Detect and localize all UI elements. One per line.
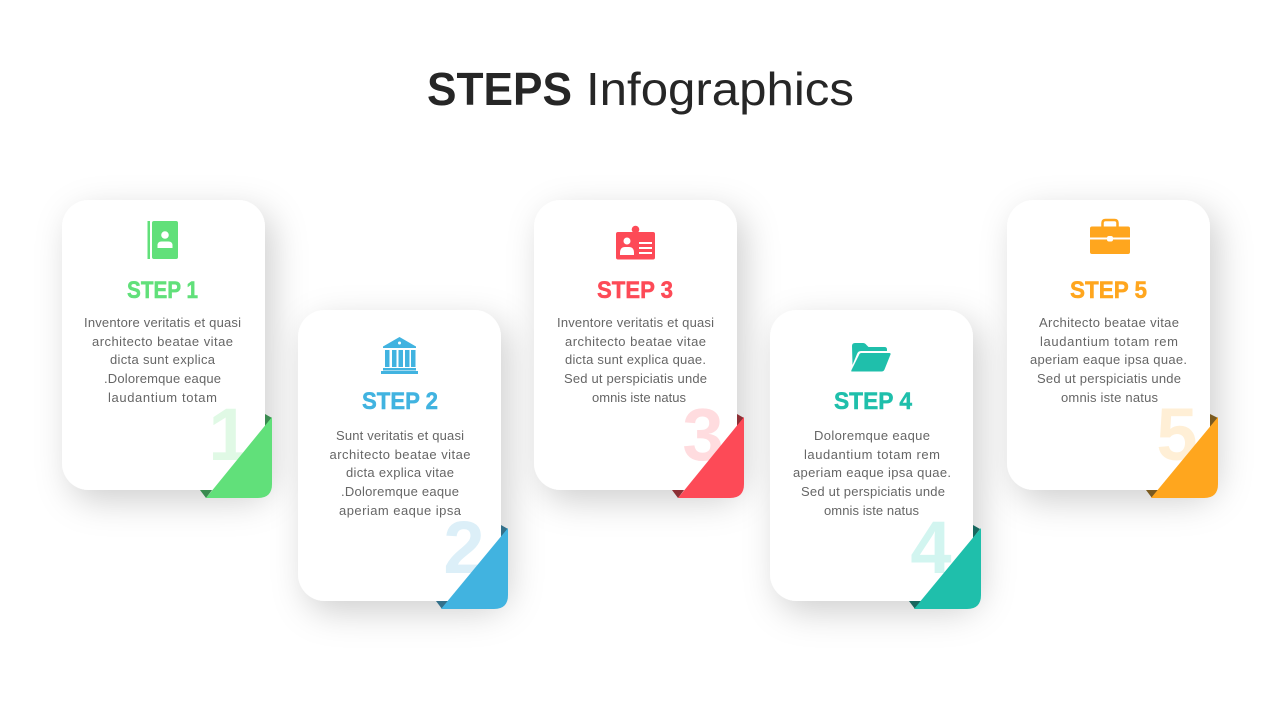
folded corner (914, 528, 981, 609)
folded corner (441, 528, 508, 609)
text block: dicta explica vitae (346, 465, 454, 480)
title (427, 63, 854, 115)
heading: STEP 1 (127, 277, 198, 304)
text block: aperiam eaque ipsa quae. (1030, 352, 1187, 367)
text block: dicta sunt explica (110, 352, 216, 367)
icon: folder (851, 343, 891, 372)
folded corner (1151, 417, 1218, 498)
title: Infographics (586, 63, 854, 115)
text block: Sunt veritatis et quasi (336, 428, 464, 443)
dark fold bottom (672, 490, 684, 498)
text block (1030, 315, 1187, 405)
text block: architecto beatae vitae (330, 447, 470, 462)
text block (84, 315, 241, 405)
text block: .Doloremque eaque (104, 371, 221, 386)
text block: laudantium totam rem (1040, 334, 1178, 349)
card background (298, 310, 501, 601)
text block: Inventore veritatis et quasi (557, 315, 714, 330)
dark fold top (737, 414, 744, 427)
card background (534, 200, 737, 490)
card background (62, 200, 265, 490)
icon: contact book (148, 221, 178, 259)
text block: dicta sunt explica quae. (565, 352, 706, 367)
text block: Inventore veritatis et quasi (84, 315, 241, 330)
text block (793, 428, 951, 518)
panel: step 5 (1007, 200, 1218, 498)
card background (1007, 200, 1210, 490)
step number: 1 (208, 393, 250, 476)
step number: 3 (682, 393, 724, 476)
title: STEPS (427, 63, 572, 115)
text block: architecto beatae vitae (92, 334, 233, 349)
text block (557, 315, 714, 405)
icon: briefcase (1090, 220, 1130, 254)
text block (330, 428, 470, 518)
step number: 2 (443, 506, 485, 589)
icon: id badge (616, 226, 655, 260)
dark fold top (265, 414, 272, 427)
text block: omnis iste natus (592, 390, 686, 405)
dark fold top (501, 525, 508, 538)
text block: aperiam eaque ipsa quae. (793, 465, 951, 480)
icon: bank (381, 337, 418, 374)
text block: Sed ut perspiciatis unde (564, 371, 707, 386)
dark fold top (1210, 414, 1218, 427)
text block: aperiam eaque ipsa (339, 503, 462, 518)
panel: step 1 (62, 200, 272, 498)
heading: STEP 5 (1070, 277, 1147, 304)
text block: Sed ut perspiciatis unde (1037, 371, 1181, 386)
text block: laudantium totam rem (804, 447, 940, 462)
text block: omnis iste natus (1061, 390, 1158, 405)
text block: omnis iste natus (824, 503, 920, 518)
text block: Architecto beatae vitae (1039, 315, 1179, 330)
panel: step 2 (298, 310, 508, 609)
text block: laudantium totam (108, 390, 217, 405)
heading: STEP 2 (362, 388, 438, 415)
text block: architecto beatae vitae (565, 334, 706, 349)
card background (770, 310, 973, 601)
dark fold bottom (1146, 490, 1158, 498)
text block: Sed ut perspiciatis unde (801, 484, 945, 499)
text block: Doloremque eaque (814, 428, 930, 443)
panel: step 4 (770, 310, 981, 609)
step number: 4 (910, 506, 952, 589)
folded corner (206, 417, 272, 498)
panel: step 3 (534, 200, 744, 498)
dark fold bottom (200, 490, 212, 498)
dark fold top (973, 525, 980, 538)
text block: .Doloremque eaque (341, 484, 459, 499)
dark fold bottom (436, 601, 448, 609)
dark fold bottom (909, 601, 921, 609)
heading: STEP 4 (834, 388, 913, 415)
heading: STEP 3 (597, 277, 673, 304)
step number: 5 (1156, 393, 1198, 476)
folded corner (678, 417, 744, 498)
